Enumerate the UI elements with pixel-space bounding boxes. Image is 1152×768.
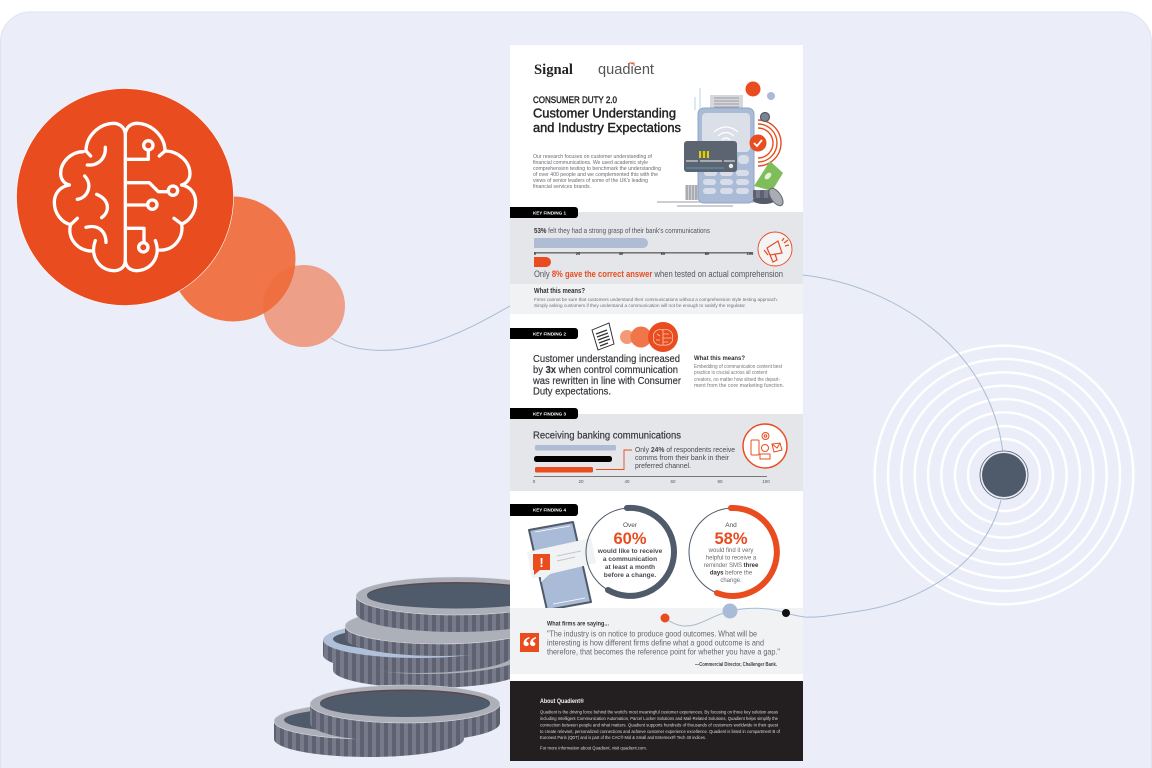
quote text: interesting is how different firms define what a good outcome is and <box>547 638 764 648</box>
bar chart: channels: 60 <box>670 479 676 484</box>
icon: small brain circles <box>620 322 678 352</box>
concentric rings <box>875 346 1133 604</box>
intro text: financial communications. We used academic style <box>533 160 648 166</box>
text: over 60%: a communication <box>603 556 657 563</box>
text: what this means 2: creators, no matter how siloed the depart- <box>694 377 780 383</box>
bar chart: channels: 40 <box>624 479 630 484</box>
bar chart: channels: 20 <box>578 479 584 484</box>
intro text: financial services brands. <box>533 184 591 190</box>
bar chart: perceived vs actual: 20 <box>576 251 581 256</box>
panel: key finding 3 <box>510 408 803 491</box>
quote text: "The industry is on notice to produce good outcomes. What will be <box>547 628 757 638</box>
tab: key finding 4 <box>510 504 578 516</box>
text: what this means 1: Simply asking customers if they understand a communication will not be enough to satisfy the regulator. <box>534 303 746 309</box>
panel: footer about Quadient <box>510 681 803 761</box>
text: and 58%: days before the <box>710 570 753 576</box>
footer text: Quadient is the driving force behind the world's most meaningful customer experiences. By focusing on three key solution areas <box>540 710 779 714</box>
tab: key finding 2 <box>510 328 578 339</box>
text: what this means 1: Firms cannot be sure that customers understand their communications without a comprehension style testing approach. <box>534 297 778 303</box>
tab: key finding 1: KEY FINDING 1 <box>533 210 566 216</box>
connector curve left <box>331 306 510 350</box>
title: Customer Understanding <box>533 106 676 120</box>
text: and 58% <box>704 522 759 584</box>
text: what this means 2 <box>694 355 784 389</box>
text: and 58%: 58% <box>714 530 748 548</box>
connector dots <box>660 604 790 622</box>
tab: key finding 2: KEY FINDING 2 <box>533 332 566 338</box>
text: what this means 2: What this means? <box>694 355 745 362</box>
footer text: including Intelligent Communication Automation, Parcel Locker Solutions and Mail-Related Solutions, Quadient helps simplify the <box>540 716 779 721</box>
text: over 60%: 60% <box>613 530 647 548</box>
connector curves right <box>665 275 1003 626</box>
title: CONSUMER DUTY 2.0 <box>533 95 617 105</box>
coin stack <box>274 577 556 757</box>
intro text: Our research focuses on customer understanding of <box>533 154 652 160</box>
title: and Industry Expectations <box>533 121 681 135</box>
panel: key finding 2 <box>510 322 784 398</box>
callout: 24%: comms from their bank in their <box>635 455 730 462</box>
quote text: therefore, that becomes the reference point for whether you have a gap." <box>547 646 780 656</box>
bar chart: perceived vs actual: 0 <box>534 251 537 256</box>
footer text: Euronext Paris (QDT) and is part of the CAC® Mid & Small and Enternext® Tech 40 indices. <box>540 735 706 740</box>
text: what this means 1: What this means? <box>534 288 585 295</box>
panel: quote <box>510 608 803 674</box>
panel: key finding 1 <box>510 207 803 314</box>
tab: key finding 3: KEY FINDING 3 <box>533 412 566 418</box>
icon: phone with alert: ! <box>539 555 544 570</box>
bar chart: perceived vs actual: 100 <box>747 251 754 256</box>
heading: receiving banking communications: Receiving banking communications <box>533 430 681 442</box>
tab: key finding 1 <box>510 207 578 218</box>
text: over 60%: before a change. <box>604 572 656 579</box>
text: over 60%: at least a month <box>605 564 655 571</box>
intro text: of over 400 people and we complemented this with the <box>533 172 658 178</box>
illustration: payment terminal <box>657 82 786 208</box>
heading: customer understanding: was rewritten in line with Consumer <box>532 376 682 387</box>
text: over 60%: would like to receive <box>597 548 663 555</box>
text: and 58%: And <box>725 522 737 529</box>
text: what firms are saying: What firms are saying... <box>547 622 609 628</box>
text: and 58%: reminder SMS three <box>704 563 759 569</box>
stat text: 8%: Only 8% gave the correct answer when tested on actual comprehension <box>534 269 783 279</box>
text: what this means 1 <box>534 288 778 309</box>
title <box>533 95 681 135</box>
footer text <box>540 710 781 750</box>
intro text <box>533 154 661 190</box>
text: and 58%: helpful to receive a <box>706 556 757 562</box>
heading: customer understanding <box>532 354 682 398</box>
quote text <box>547 628 780 656</box>
tab: key finding 4: KEY FINDING 4 <box>533 508 566 514</box>
icon: phone with alert <box>527 522 596 610</box>
bar chart: perceived vs actual: 60 <box>661 251 666 256</box>
bar chart: perceived vs actual: 80 <box>705 251 710 256</box>
icon: brain in orange circle <box>16 88 234 306</box>
callout: 24%: preferred channel. <box>635 463 691 470</box>
bar chart: channels: 80 <box>717 479 723 484</box>
text: over 60% <box>597 522 663 579</box>
chart: 60% donut <box>586 508 674 596</box>
footer text: to create relevant, personalized connections and achieve customer experience excellence. Quadient is listed in compartment B of <box>540 729 781 734</box>
text: and 58%: would find it very <box>708 548 753 554</box>
bar chart: channels <box>533 445 770 484</box>
callout: 24%: Only 24% of respondents receive <box>635 447 735 454</box>
intro text: comprehension testing to benchmark the understanding <box>533 166 661 172</box>
logo: quadient: quadient <box>598 61 655 78</box>
heading: customer understanding: by 3x when control communication <box>533 365 678 376</box>
connector line <box>596 450 632 470</box>
icon: megaphone <box>758 232 792 266</box>
bar chart: channels: 100 <box>762 479 770 484</box>
signal node <box>980 451 1028 499</box>
icon: quote mark: “ <box>522 631 537 664</box>
text: and 58%: change. <box>720 578 742 584</box>
heading: customer understanding: Customer understanding increased <box>533 354 680 365</box>
footer heading: About Quadient® <box>540 697 584 705</box>
footer text: connection between people and what matters. Quadient supports hundreds of thousands of customers worldwide in their quest <box>540 722 779 728</box>
text: what this means 2: practice is crucial across all content <box>694 370 767 376</box>
icon: document <box>592 323 614 350</box>
stat text: 53%: 53% felt they had a strong grasp of their bank's communications <box>534 228 710 235</box>
intro text: views of senior leaders of some of the UK's leading <box>533 178 648 184</box>
logo: Signal: Signal <box>534 62 573 78</box>
bar chart: channels: 0 <box>533 479 536 484</box>
panel: key finding 4 <box>510 504 777 610</box>
chart: 58% donut <box>689 508 777 596</box>
text: what this means 2: Embedding of communication content best <box>694 364 782 370</box>
tab: key finding 3 <box>510 408 578 419</box>
bar chart: perceived vs actual: 40 <box>619 251 624 256</box>
decorative orange circles <box>170 196 345 347</box>
text: over 60%: Over <box>623 522 638 529</box>
bar chart: perceived vs actual <box>534 238 754 267</box>
footer text: For more information about Quadient, visit quadient.com. <box>540 746 647 750</box>
icon: multichannel person <box>743 424 787 468</box>
callout: 24% <box>635 447 735 470</box>
attribution: —Commercial Director, Challenger Bank. <box>695 662 777 668</box>
heading: customer understanding: Duty expectations. <box>533 386 611 398</box>
text: what this means 2: ment from the core marketing function. <box>694 383 784 389</box>
panel: white report card <box>510 45 803 681</box>
